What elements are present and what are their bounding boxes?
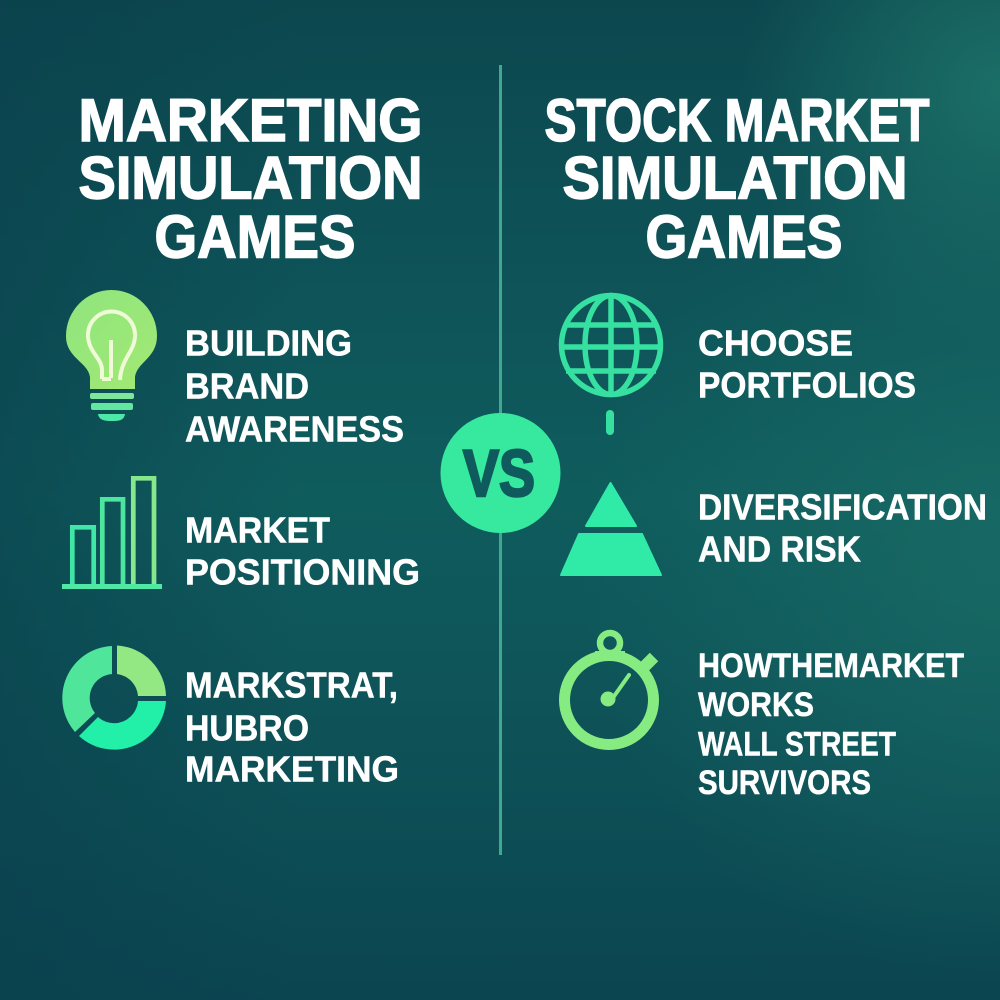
text: choose portfolios xyxy=(698,322,916,406)
heading: marketing simulation games: SIMULATION xyxy=(78,144,422,212)
heading: stock market simulation games xyxy=(544,87,930,270)
text: markstrat hubro marketing xyxy=(185,664,399,790)
icon: light bulb xyxy=(66,290,157,421)
text: how the market works wall street survivors: HOWTHEMARKET xyxy=(698,647,964,685)
heading: marketing simulation games: MARKETING xyxy=(78,87,422,154)
heading: stock market simulation games: SIMULATION xyxy=(562,144,908,212)
text: how the market works wall street survivors xyxy=(698,647,964,802)
text: market positioning xyxy=(185,510,420,592)
text: how the market works wall street survivors: SURVIVORS xyxy=(698,764,871,802)
vs badge xyxy=(440,413,560,533)
text: diversification and risk: AND RISK xyxy=(698,528,861,570)
text: market positioning: MARKET xyxy=(185,510,330,550)
center divider xyxy=(499,65,502,855)
icon: bar chart xyxy=(62,478,162,589)
icon: globe xyxy=(562,296,660,435)
icon: pyramid xyxy=(561,483,661,575)
text: choose portfolios: CHOOSE xyxy=(698,322,853,364)
text: choose portfolios: PORTFOLIOS xyxy=(698,364,916,406)
icon: stopwatch xyxy=(564,633,654,744)
text: diversification and risk xyxy=(698,486,987,570)
heading: stock market simulation games: GAMES xyxy=(646,204,842,270)
text: building brand awareness: AWARENESS xyxy=(185,408,404,450)
text: how the market works wall street survivors: WORKS xyxy=(698,686,814,724)
icon: donut chart xyxy=(62,646,166,750)
heading: marketing simulation games: GAMES xyxy=(154,204,356,270)
text: markstrat hubro marketing: MARKSTRAT, xyxy=(185,664,398,706)
text: building brand awareness: BRAND xyxy=(185,366,309,406)
vs badge: VS xyxy=(463,436,535,510)
text: market positioning: POSITIONING xyxy=(185,552,420,592)
text: markstrat hubro marketing: MARKETING xyxy=(185,748,399,790)
text: building brand awareness: BUILDING xyxy=(185,322,352,364)
text: markstrat hubro marketing: HUBRO xyxy=(185,708,309,748)
text: building brand awareness xyxy=(185,322,404,450)
text: how the market works wall street survivors: WALL STREET xyxy=(698,726,896,764)
heading: marketing simulation games xyxy=(78,87,422,270)
